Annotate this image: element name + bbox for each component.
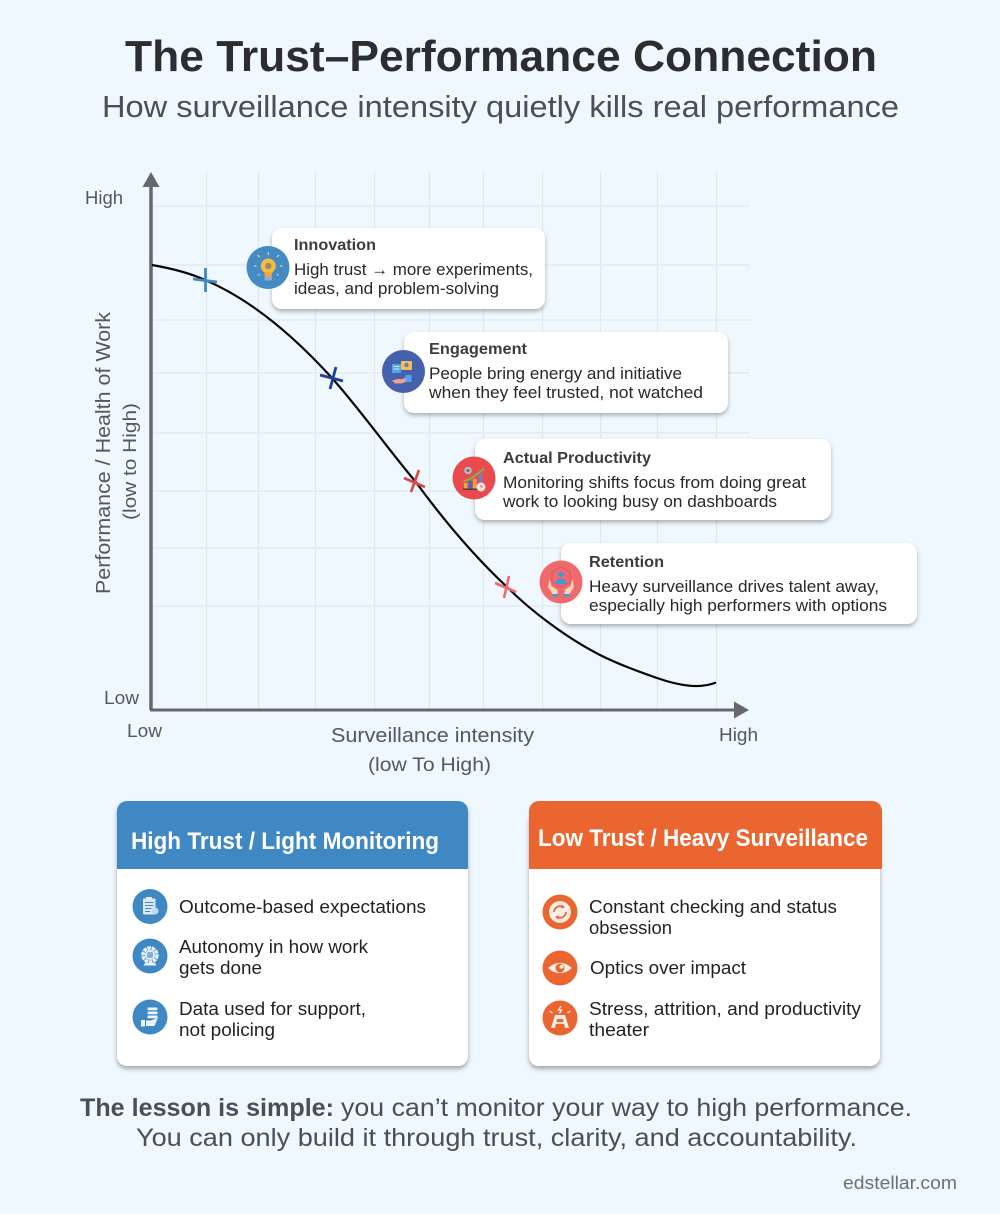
- panel: low trust: Optics over impact: [590, 957, 746, 978]
- x axis title: [331, 725, 534, 776]
- icon: data stack and hand: [132, 1000, 168, 1034]
- callout: innovation: [246, 228, 545, 309]
- panel: high trust: Data used for support,: [179, 998, 366, 1019]
- icon: eye: [542, 950, 578, 986]
- panel header: [117, 801, 468, 869]
- panel: high trust: not policing: [179, 1019, 275, 1040]
- icon: circular arrows: [542, 894, 578, 930]
- callout: engagement: when they feel trusted, not watched: [428, 384, 703, 402]
- chart: trust-performance curve: [142, 172, 750, 718]
- lesson text: you can’t monitor your way to high performance.: [341, 1094, 912, 1122]
- callout: innovation: Innovation: [294, 237, 376, 254]
- callout: actual productivity: [452, 439, 831, 520]
- y axis low label: Low: [104, 688, 140, 708]
- marker: engagement: [320, 367, 343, 389]
- brand: edstellar.com: [843, 1173, 957, 1193]
- x axis high label: High: [719, 725, 758, 745]
- callout: actual productivity: Actual Productivity: [503, 450, 651, 467]
- callout: retention: [540, 543, 917, 624]
- lesson text: The lesson is simple:: [80, 1094, 334, 1122]
- callout: actual productivity: Monitoring shifts focus from doing great: [503, 474, 806, 492]
- x axis low label: Low: [127, 721, 163, 741]
- callout: retention: especially high performers with options: [589, 597, 887, 615]
- x axis title: (low To High): [368, 755, 491, 776]
- callout: actual productivity: work to looking busy on dashboards: [502, 493, 777, 511]
- callout: retention: Heavy surveillance drives talent away,: [589, 578, 879, 596]
- callout: engagement: People bring energy and initiative: [429, 365, 682, 383]
- marker: retention: [495, 576, 516, 598]
- icon: gear with fist: [132, 938, 168, 974]
- callout: retention: Retention: [589, 554, 664, 571]
- marker: innovation: [193, 268, 217, 292]
- icon: rising chart: [452, 456, 496, 500]
- panel: low trust: Constant checking and status: [589, 896, 837, 917]
- icon: light bulb: [246, 246, 290, 289]
- y axis high label: High: [85, 188, 123, 208]
- callout: engagement: [382, 332, 728, 413]
- panel: low trust: theater: [589, 1019, 649, 1040]
- x axis title: Surveillance intensity: [331, 725, 534, 747]
- icon: hands holding person: [540, 560, 582, 604]
- panel: low trust: Low Trust / Heavy Surveillance: [538, 825, 868, 852]
- y axis: [142, 172, 160, 710]
- panel: high trust: High Trust / Light Monitoring: [131, 828, 439, 855]
- panel: high trust: gets done: [179, 957, 262, 978]
- subtitle: How surveillance intensity quietly kills real performance: [102, 90, 899, 124]
- callout: engagement: Engagement: [429, 341, 527, 358]
- title: The Trust–Performance Connection: [125, 33, 877, 81]
- lesson text: [80, 1094, 912, 1152]
- y axis title: [93, 311, 140, 594]
- performance curve: [152, 265, 716, 686]
- callout: innovation: ideas, and problem-solving: [294, 280, 499, 298]
- panel: low trust: [529, 801, 882, 1066]
- panel header: [529, 801, 882, 869]
- panel: high trust: Autonomy in how work: [179, 936, 369, 957]
- icon: clipboard: [132, 889, 168, 924]
- y axis title: (low to High): [119, 403, 140, 520]
- lesson text: You can only build it through trust, clarity, and accountability.: [136, 1124, 857, 1152]
- panel: low trust: obsession: [589, 917, 672, 938]
- callout: innovation: High trust → more experiments,: [294, 261, 533, 279]
- icon: hand with chat: [382, 350, 425, 393]
- marker: productivity: [404, 470, 425, 492]
- panel: low trust: Stress, attrition, and productivity: [589, 998, 862, 1019]
- panel: high trust: Outcome-based expectations: [179, 896, 426, 917]
- panel: high trust: [117, 801, 468, 1066]
- y axis title: Performance / Health of Work: [93, 311, 115, 594]
- x axis: [150, 702, 749, 718]
- icon: stress figure: [542, 1000, 578, 1036]
